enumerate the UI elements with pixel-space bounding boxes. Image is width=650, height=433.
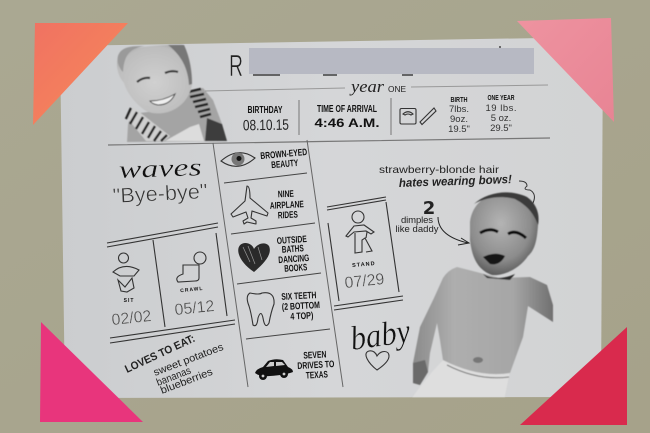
birth stats: BIRTH [450,95,468,104]
waves text [112,154,208,208]
birth stats: 9oz. [450,114,468,125]
icon: scale and ruler [400,108,436,124]
title (partly covered): R [229,48,243,83]
item: heart with activities: DANCING [278,253,310,266]
note: 2 dimples: like daddy [396,224,439,235]
item: seven drives to texas: DRIVES TO [297,359,335,372]
note: 2 dimples: 2 [423,198,435,219]
milestone: crawl: 05/12 [174,298,215,319]
milestone: sit [111,253,152,329]
item: heart with activities: OUTSIDE [276,234,307,247]
milestone: crawl: CRAWL [180,286,204,294]
birth stats [448,95,470,135]
birth stats: 19.5" [448,124,470,135]
arrow: curl to hair [519,181,534,207]
corner: coral top left [33,23,128,125]
subtitle: year one [205,77,548,96]
one year stats [486,93,516,134]
panel: stand: STAND [352,261,376,269]
item: seven drives to texas: SEVEN [303,349,327,362]
item: brown-eyed beauty: BROWN-EYED [260,147,308,162]
title (partly covered) [229,46,500,83]
item: six teeth: 4 TOP) [290,310,314,323]
waves text: waves [118,154,202,184]
item: nine airplane rides: AIRPLANE [270,199,304,212]
milestone: sit: SIT [124,298,134,304]
header rule [108,138,550,145]
corner: red bottom right [520,327,627,425]
birthday: 08.10.15 [243,117,289,134]
subtitle: year one: year [349,77,384,96]
birthday [243,105,289,134]
one year stats: 29.5" [490,123,512,134]
item: nine airplane rides: RIDES [278,209,298,222]
item: brown-eyed beauty: BEAUTY [271,158,299,171]
panel: stand [327,197,403,310]
item: heart with activities [238,234,310,275]
panel rules: milestones [107,223,235,343]
arrow: to dimple [438,217,469,245]
item: six teeth [247,290,320,326]
redaction block [249,48,534,74]
loves to eat: sweet potatoes [152,341,225,379]
baby handwritten text: baby [348,313,413,358]
time of arrival: 4:46 A.M. [314,116,380,130]
loves to eat: blueberries [159,366,214,397]
divider [224,173,330,339]
corner: magenta bottom left [40,322,143,422]
note: strawberry-blonde hair: hates wearing bows! [399,172,512,190]
birthday: BIRTHDAY [248,105,283,116]
item: heart with activities: BOOKS [284,262,308,275]
item: brown-eyed beauty [221,147,308,171]
note: strawberry-blonde hair: strawberry-blonde hair [379,164,500,176]
one year stats: 5 oz. [491,113,511,124]
birth stats: 7lbs. [449,104,469,115]
waves text: "Bye-bye" [112,180,208,208]
item: seven drives to texas: TEXAS [306,369,328,382]
subtitle: year one: ONE [388,84,406,94]
item: six teeth: SIX TEETH [281,290,317,303]
item: six teeth: (2 BOTTOM [282,300,320,313]
note: strawberry-blonde hair [379,164,512,190]
item: seven drives to texas [255,349,335,382]
time of arrival: TIME OF ARRIVAL [317,104,377,115]
corner: pink top right [517,18,614,122]
panel: stand: 07/29 [344,271,385,292]
item: nine airplane rides: NINE [278,189,294,200]
one year stats: 19 lbs. [486,103,516,114]
photo: smiling baby in striped shirt [117,45,227,142]
time of arrival [314,104,380,130]
divider [299,98,391,135]
paper poster [60,37,603,398]
one year stats: ONE YEAR [488,93,515,102]
item: nine airplane rides [231,186,304,224]
center column rules [213,140,343,387]
milestone: sit: 02/02 [111,308,152,329]
loves to eat [123,333,225,397]
note: 2 dimples: dimples [401,215,433,226]
loves to eat: bananas [155,365,193,389]
loves to eat: LOVES TO EAT: [123,333,197,376]
item: heart with activities: BATHS [281,243,304,256]
note: 2 dimples [396,198,439,235]
milestone: crawl [174,252,215,319]
photo: laughing shirtless baby [412,192,553,397]
